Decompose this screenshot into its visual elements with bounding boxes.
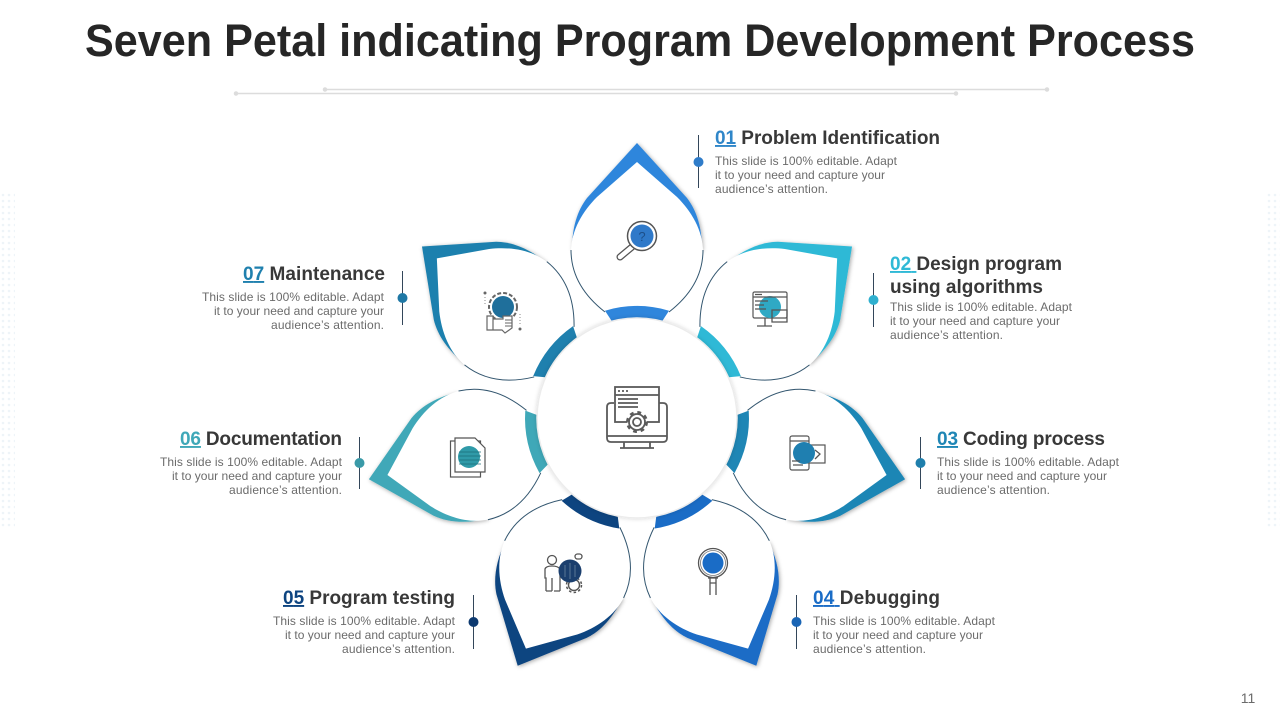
petal 06: [354, 375, 559, 543]
text block 02: 02 Design program: [890, 254, 1062, 275]
text block 07: [202, 264, 385, 332]
marker 05: [468, 595, 478, 649]
text block 04: This slide is 100% editable. Adapt: [813, 614, 996, 628]
icon: phone and code window: [790, 436, 825, 470]
marker 02: [868, 273, 878, 327]
text block 06: [160, 429, 343, 497]
text block 01: audience’s attention.: [715, 182, 828, 196]
petal 05: [459, 475, 655, 694]
petal 03: [715, 375, 920, 543]
center circle: [537, 318, 737, 518]
icon: code monitor: [753, 292, 787, 326]
marker 04: [792, 595, 802, 649]
text block 02: audience’s attention.: [890, 328, 1003, 342]
text block 05: audience’s attention.: [342, 642, 455, 656]
text block 07: This slide is 100% editable. Adapt: [202, 290, 385, 304]
text block 04: 04 Debugging: [813, 588, 940, 609]
text block 05: 05 Program testing: [283, 588, 455, 609]
petal 04: [619, 475, 815, 694]
page number: 11: [1241, 690, 1255, 706]
text block 07: it to your need and capture your: [214, 304, 384, 318]
text block 05: it to your need and capture your: [285, 628, 455, 642]
icon: monitor with gear: [607, 387, 667, 448]
icon: magnifier question: [620, 222, 656, 257]
petal 07: [381, 196, 604, 410]
icon: gear and hand: [484, 292, 522, 333]
marker 03: [916, 437, 926, 489]
marker 07: [398, 271, 408, 325]
text block 01: it to your need and capture your: [715, 168, 885, 182]
text block 02: using algorithms: [890, 277, 1043, 298]
icon: magnifier question: ?: [638, 229, 646, 244]
text block 02: it to your need and capture your: [890, 314, 1060, 328]
text block 03: audience’s attention.: [937, 483, 1050, 497]
marker 01: [694, 135, 704, 188]
text block 01: This slide is 100% editable. Adapt: [715, 154, 898, 168]
petal 01: [571, 143, 703, 323]
text block 06: This slide is 100% editable. Adapt: [160, 455, 343, 469]
icon: debugging lens: [698, 548, 728, 595]
text block 05: [273, 588, 456, 656]
text block 04: audience’s attention.: [813, 642, 926, 656]
marker 06: [354, 437, 364, 489]
icon: document: [450, 438, 485, 477]
icon: person and gear: [545, 554, 582, 592]
background pattern: [0, 192, 1280, 527]
text block 07: 07 Maintenance: [243, 264, 385, 285]
text block 03: [937, 429, 1120, 497]
petal 02: [670, 196, 893, 410]
text block 01: 01 Problem Identification: [715, 128, 940, 149]
text block 04: [813, 588, 996, 656]
text block 06: it to your need and capture your: [172, 469, 342, 483]
text block 03: it to your need and capture your: [937, 469, 1107, 483]
text block 04: it to your need and capture your: [813, 628, 983, 642]
text block 02: [890, 254, 1073, 342]
text block 01: [715, 128, 940, 196]
text block 03: This slide is 100% editable. Adapt: [937, 455, 1120, 469]
text block 06: 06 Documentation: [180, 429, 342, 450]
text block 07: audience’s attention.: [271, 318, 384, 332]
text block 03: 03 Coding process: [937, 429, 1105, 450]
title: Seven Petal indicating Program Development Process: [85, 15, 1195, 66]
text block 06: audience’s attention.: [229, 483, 342, 497]
text block 05: This slide is 100% editable. Adapt: [273, 614, 456, 628]
text block 02: This slide is 100% editable. Adapt: [890, 300, 1073, 314]
